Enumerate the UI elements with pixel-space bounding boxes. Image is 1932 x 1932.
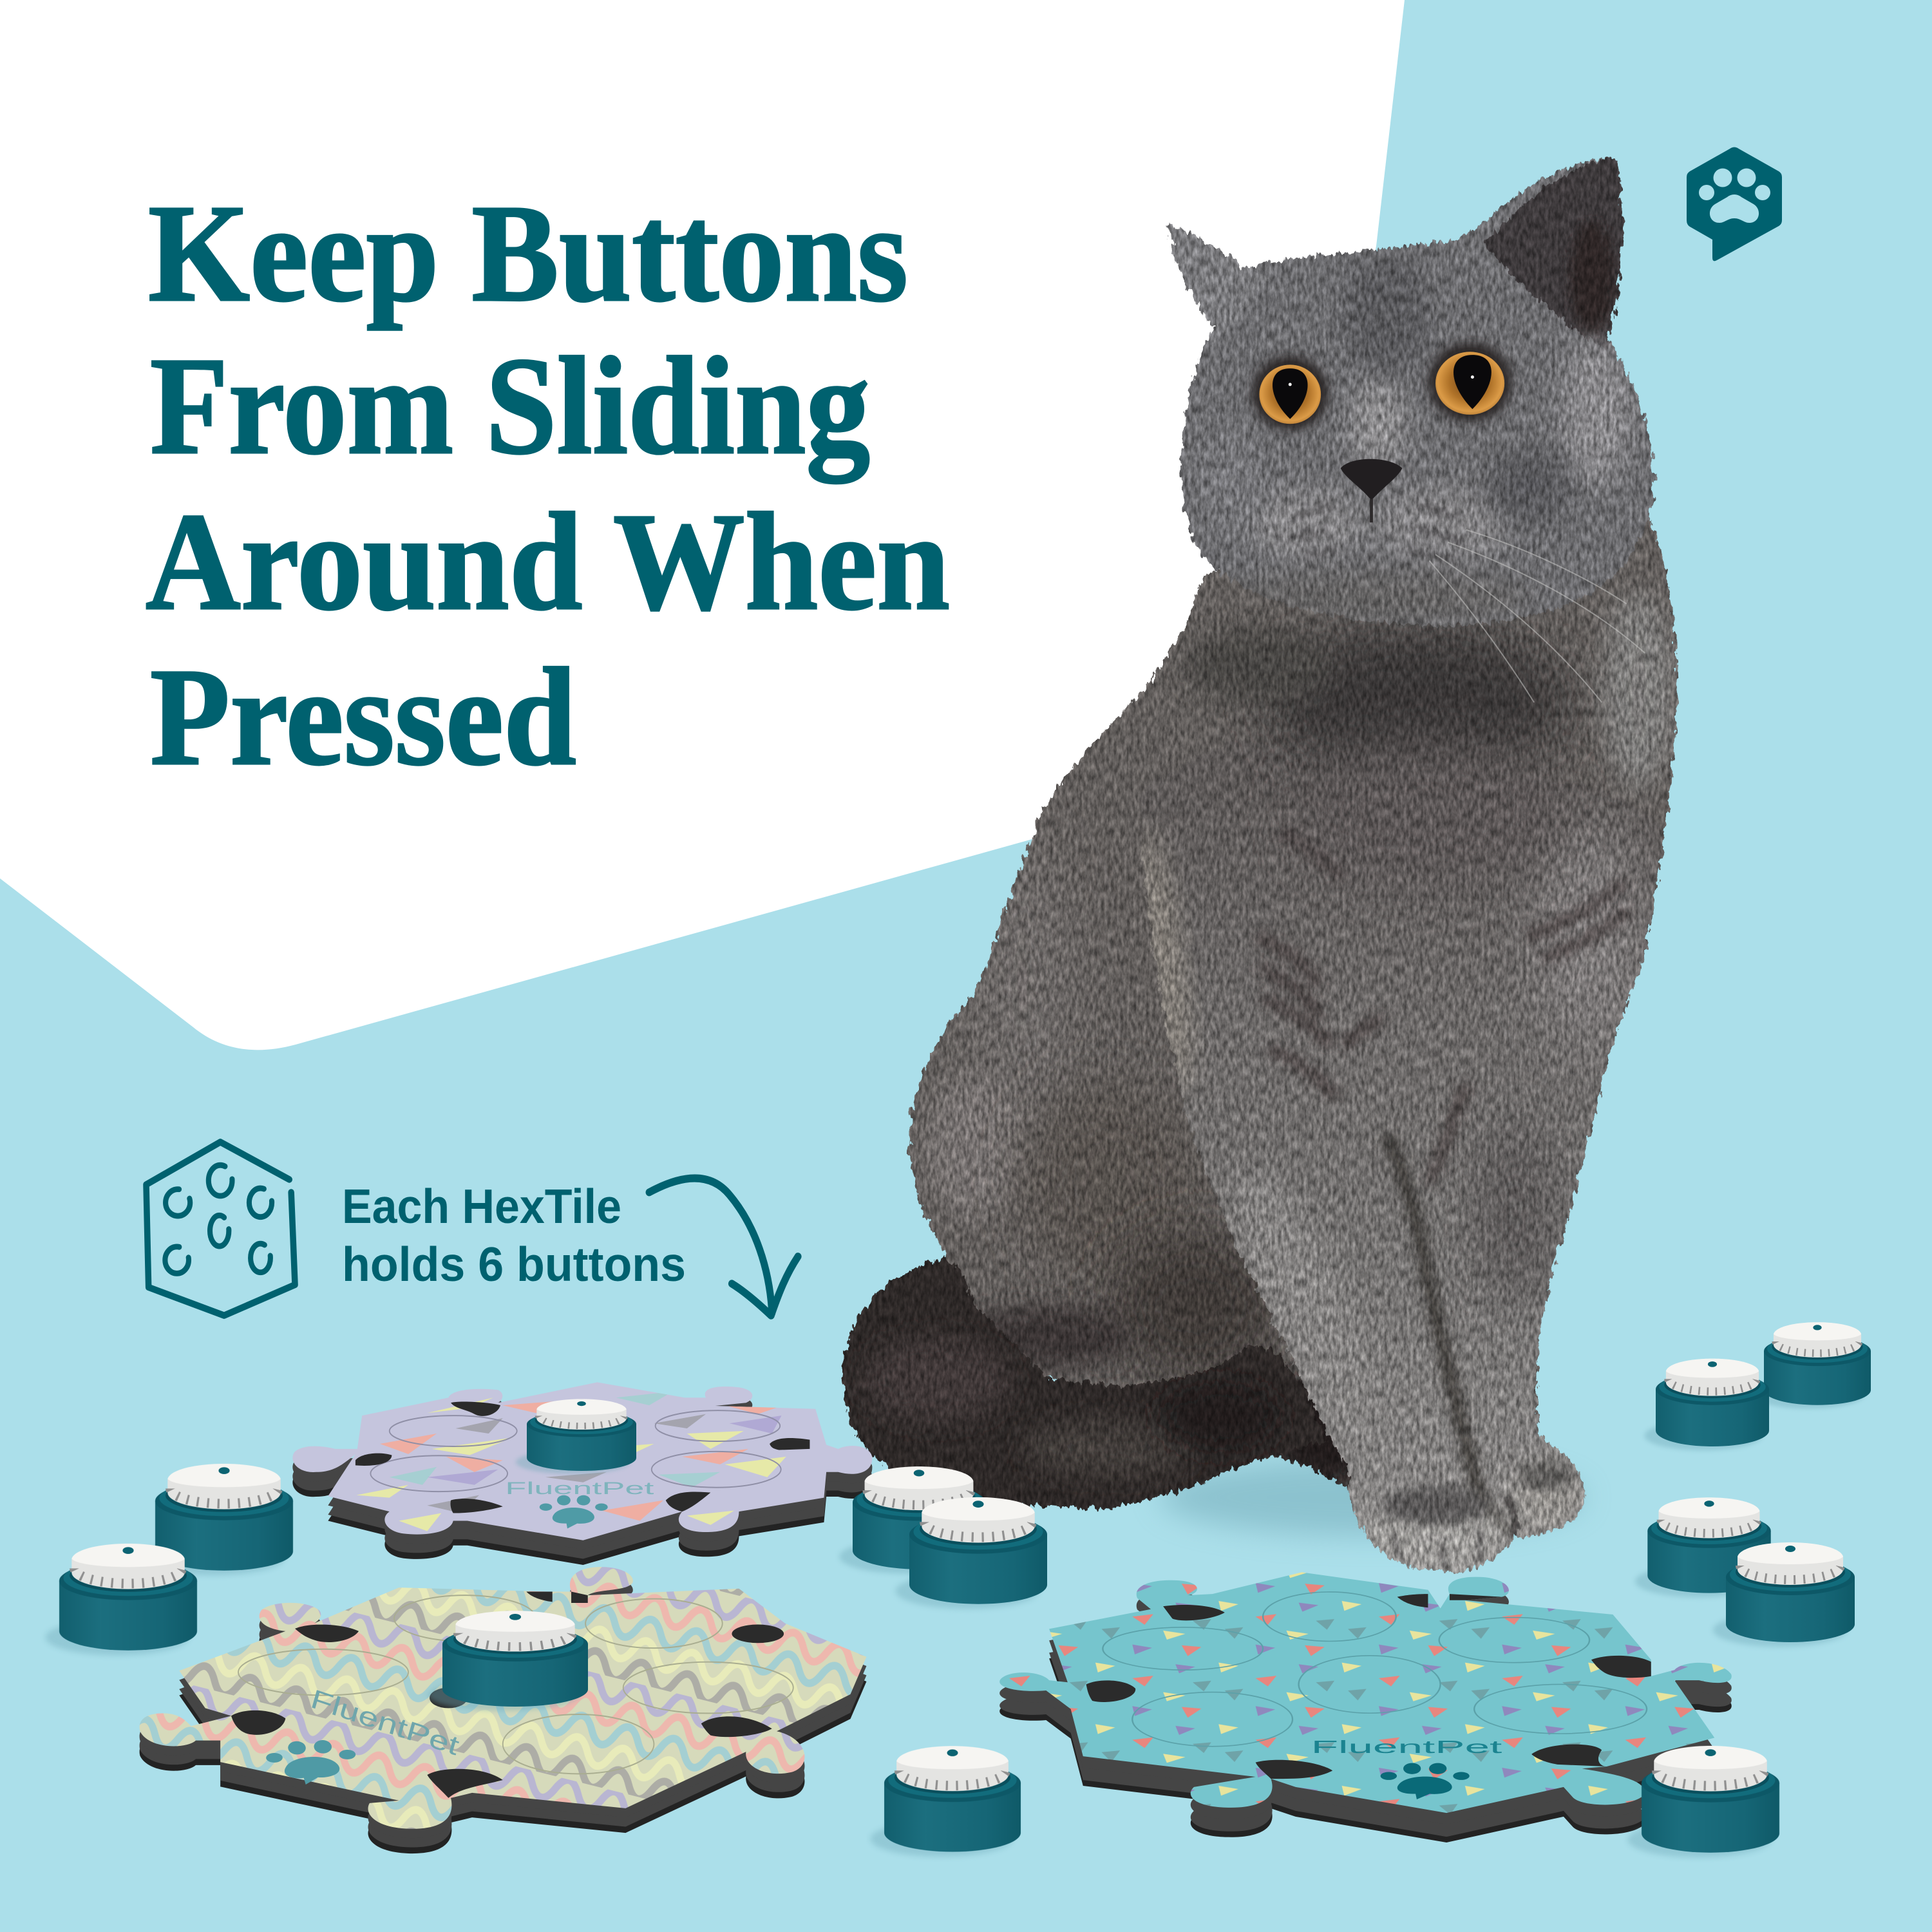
- cat body: [907, 517, 1679, 1489]
- hextile: cream squiggles: [140, 1567, 866, 1853]
- chest dark ruff: [1183, 591, 1676, 881]
- icon: FluentPet paw speech-bubble logo: [1687, 147, 1782, 261]
- button: right middle front: [1713, 1542, 1855, 1647]
- hextile: cream squiggles: FluentPet: [308, 1684, 462, 1761]
- title: Keep Buttons: [148, 176, 908, 330]
- arrow: pointing down to the tiles: [649, 1179, 798, 1316]
- cat nose and mouth: [1341, 459, 1402, 522]
- cat head: [1166, 156, 1658, 629]
- button: right middle rear: [1635, 1497, 1771, 1597]
- cat left eye: [1252, 356, 1329, 430]
- caption: each hextile holds 6 buttons: Each HexTile: [342, 1179, 621, 1233]
- icon: hand-drawn hextile with six holes: [146, 1142, 295, 1316]
- hextile: teal triangles: FluentPet: [1311, 1737, 1502, 1757]
- hextile: teal triangles: [999, 1572, 1732, 1842]
- cat whiskers: [1429, 530, 1645, 703]
- cat right eye: [1428, 343, 1512, 421]
- button: right top front: [1644, 1359, 1769, 1450]
- hextile: lilac triangles: [292, 1382, 872, 1565]
- button: right top rear: [1753, 1322, 1871, 1409]
- title: From Sliding: [150, 328, 870, 484]
- button: bottom right: [1628, 1746, 1779, 1857]
- cat shadow on floor: [1159, 1459, 1584, 1536]
- cat chest and front legs: [1140, 815, 1667, 1574]
- button: centre front: [896, 1497, 1047, 1609]
- title: [146, 176, 950, 794]
- button: left lower: [46, 1544, 197, 1655]
- button: on cream tile: [428, 1611, 588, 1711]
- caption: each hextile holds 6 buttons: [342, 1179, 686, 1291]
- button: on lilac tile: [516, 1399, 636, 1474]
- cat tail: [841, 1255, 1328, 1512]
- title: Pressed: [150, 639, 576, 794]
- cat photo illustration: [838, 148, 1725, 1589]
- white angled panel: [0, 0, 1405, 1050]
- button: centre rear: [839, 1466, 985, 1574]
- title: Around When: [146, 484, 950, 639]
- button: bottom centre: [871, 1746, 1021, 1857]
- button: left upper: [142, 1464, 293, 1575]
- hextile: lilac triangles: FluentPet: [505, 1478, 655, 1498]
- caption: each hextile holds 6 buttons: holds 6 buttons: [342, 1237, 686, 1291]
